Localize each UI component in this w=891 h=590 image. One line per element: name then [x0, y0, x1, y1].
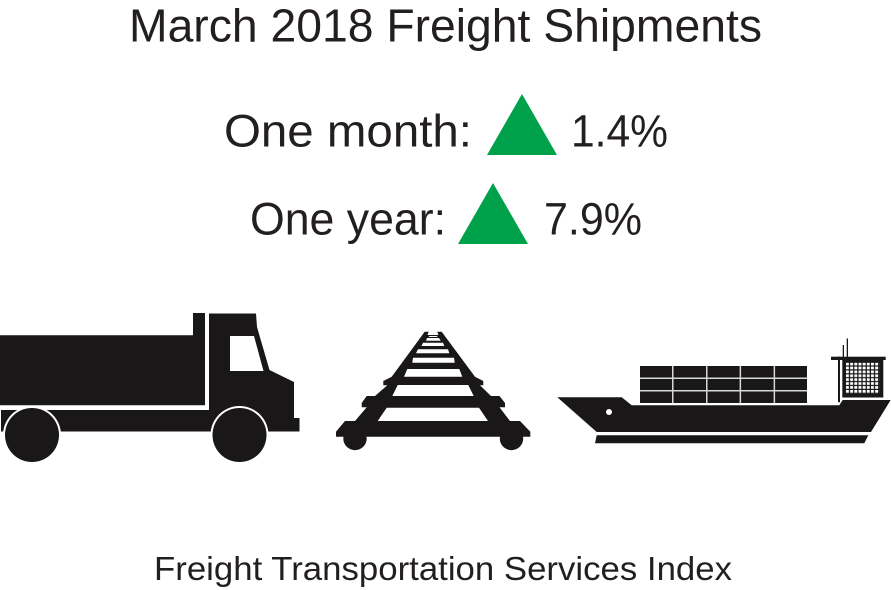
- footer caption: Freight Transportation Services Index: [154, 551, 732, 588]
- track silhouette: [336, 332, 530, 437]
- left track wheel: [343, 427, 367, 450]
- porthole: [606, 409, 612, 415]
- right track wheel: [500, 427, 523, 450]
- one month statistic: [224, 94, 668, 156]
- truck cab and chassis: [1, 314, 300, 432]
- front wheel: [210, 406, 268, 464]
- icon: green up triangle, one year: [458, 183, 528, 244]
- label: one month: One month:: [224, 106, 472, 156]
- value: one year change: 7.9%: [544, 194, 642, 244]
- rear wheel: [3, 406, 61, 464]
- icon: container ship: [557, 338, 891, 443]
- truck cargo bed: [0, 313, 205, 405]
- icon: green up triangle, one month: [487, 94, 557, 155]
- icon: railroad track: [336, 332, 530, 450]
- truck window: [230, 336, 264, 371]
- one year statistic: [250, 183, 642, 244]
- ship hull: [557, 397, 891, 432]
- stacked containers: [640, 366, 807, 403]
- icon: truck: [0, 313, 300, 464]
- gaps between sleepers: [378, 336, 488, 421]
- title: March 2018 Freight Shipments: [129, 0, 762, 52]
- value: one month change: 1.4%: [571, 106, 668, 156]
- ship bridge tower: [831, 338, 886, 402]
- label: one year: One year:: [250, 194, 446, 244]
- hull waterline stripe: [595, 435, 868, 443]
